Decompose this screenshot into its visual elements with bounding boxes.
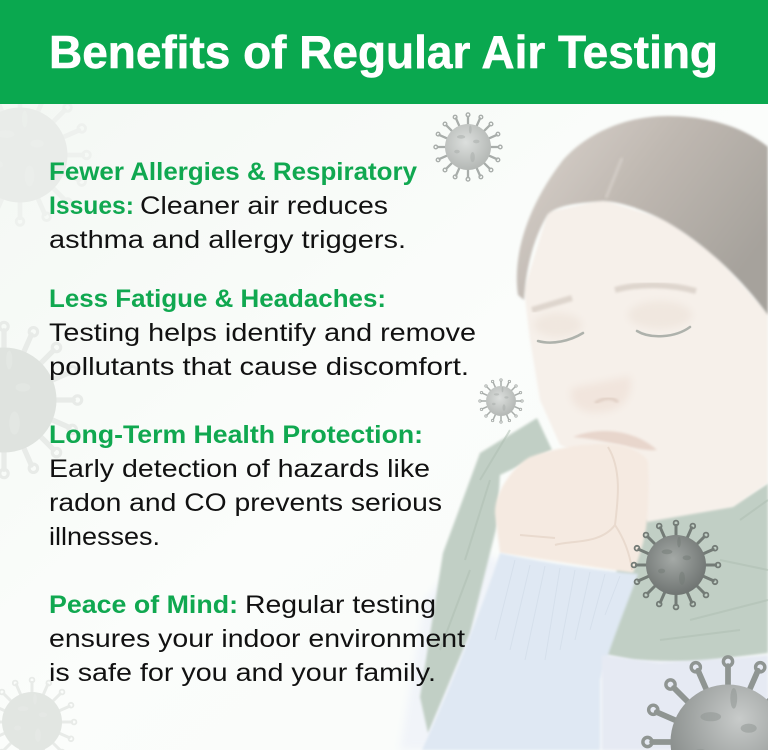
sweater body behind scarf <box>400 545 768 750</box>
text block: long-term health: Early detection of hazards like <box>49 455 430 483</box>
text block: peace of mind: Regular testing <box>245 591 436 619</box>
text block: peace of mind: ensures your indoor environment <box>49 625 465 653</box>
text block: fatigue: Testing helps identify and remove <box>49 319 476 347</box>
text block: allergies: Fewer Allergies & Respiratory <box>49 158 417 186</box>
nose <box>571 376 631 413</box>
text block: fatigue: Less Fatigue & Headaches: <box>49 285 386 313</box>
nostril <box>595 398 618 403</box>
lips <box>573 431 657 450</box>
woman coughing <box>400 116 768 750</box>
title: Benefits of Regular Air Testing <box>49 26 718 78</box>
text block: allergies: asthma and allergy triggers. <box>49 226 406 254</box>
text block: allergies <box>49 158 417 254</box>
scarf texture <box>440 430 768 650</box>
face <box>524 200 768 522</box>
header banner <box>0 0 768 104</box>
text block: peace of mind <box>49 591 465 687</box>
text block: long-term health: Long-Term Health Protection: <box>49 421 423 449</box>
text block: allergies: Issues: <box>49 192 134 220</box>
text block: long-term health: illnesses. <box>49 523 160 551</box>
eyelids shadow <box>534 301 692 337</box>
eyebrows <box>532 285 696 310</box>
cuff ribbing <box>495 560 620 660</box>
closed eyes <box>538 327 690 343</box>
text block: fatigue <box>49 285 476 381</box>
finger lines <box>520 447 632 570</box>
sweater body right <box>602 655 768 750</box>
virus: on scarf <box>632 521 720 609</box>
pale background viruses, left side <box>0 85 90 750</box>
virus: bottom left <box>0 678 76 750</box>
text block: peace of mind: is safe for you and your family. <box>49 659 436 687</box>
text block: allergies: Cleaner air reduces <box>140 192 388 220</box>
virus: top centre <box>434 113 502 181</box>
virus: by the cheek <box>479 379 523 423</box>
hair <box>517 116 768 315</box>
text block: long-term health: radon and CO prevents serious <box>49 489 442 517</box>
virus: bottom right <box>643 657 768 750</box>
virus: middle left <box>0 322 82 478</box>
hair parting <box>606 158 622 198</box>
text block: peace of mind: Peace of Mind: <box>49 591 238 619</box>
scarf <box>420 418 768 733</box>
text block: fatigue: pollutants that cause discomfort. <box>49 353 469 381</box>
virus: top left <box>0 85 90 225</box>
fist <box>495 444 649 573</box>
sweater sleeve <box>422 553 638 750</box>
text block: long-term health <box>49 421 442 551</box>
dark foreground viruses <box>434 113 768 750</box>
